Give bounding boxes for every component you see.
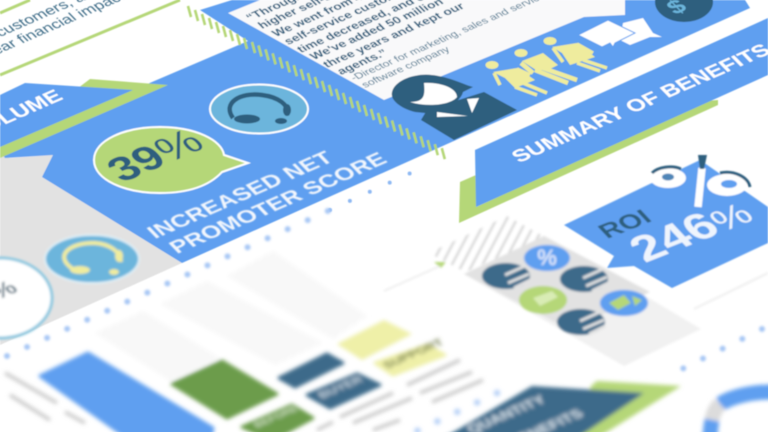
- icon: dollar circle: [655, 0, 713, 22]
- rule: [384, 266, 768, 309]
- chart: donut: [710, 392, 768, 432]
- banner green shadow: [459, 100, 718, 223]
- green hatch divider: [188, 6, 445, 159]
- quote text: [243, 0, 467, 77]
- chart: bar blue: [40, 353, 213, 432]
- big percent icon: [650, 155, 750, 207]
- volume banner: [0, 79, 168, 158]
- blurred lower content: [0, 210, 768, 377]
- icon: navy stripes circle c: [557, 309, 605, 335]
- panel: blue promoter score and quote frame: [0, 0, 750, 263]
- dotted divider: bottom: [417, 393, 497, 431]
- ROI label: ROI: [592, 205, 657, 243]
- banner navy: [440, 386, 644, 432]
- icon: blue percent circle: [524, 245, 570, 271]
- callout: ROI 246 percent: [564, 155, 768, 288]
- banner label: SUMMARY OF BENEFITS: [507, 40, 768, 166]
- heading: summary of benefits: [459, 18, 768, 223]
- intro text block: [0, 0, 180, 75]
- icon: blue percent circle: %: [537, 245, 557, 270]
- chart: label green: [242, 404, 313, 432]
- dotted divider: lower left: [7, 210, 330, 356]
- heading: increased net promoter score: INCREASED NET: [142, 147, 338, 242]
- chart: bar yellow: [337, 320, 412, 360]
- icon: headset circle yellow: [45, 235, 139, 283]
- chart: label navy: [307, 373, 380, 408]
- callout: 39 percent bubble: 39%: [98, 122, 213, 190]
- icon: navy stripes circle a: [482, 263, 530, 289]
- heading: quantity benefits banner: [440, 381, 681, 432]
- chart: hatched backing bands: [95, 251, 367, 381]
- banner blue: [0, 83, 133, 147]
- banner label: [464, 393, 587, 432]
- heading: increased net promoter score: PROMOTER SCORE: [164, 148, 392, 257]
- panel: icon plate: [464, 236, 701, 366]
- top green rule: [0, 0, 180, 75]
- ROI value: 246%: [619, 191, 762, 270]
- body text placeholder rows: [5, 360, 483, 430]
- callout: white percent circle: [0, 258, 52, 338]
- banner blue: [475, 18, 768, 207]
- chart: label yellow: SUPPORT: [380, 336, 447, 371]
- quote attribution: software company: [359, 44, 453, 90]
- icon: headset circle: [210, 84, 308, 134]
- banner green shadow: [575, 381, 681, 432]
- banner green shadow: [0, 79, 168, 158]
- icon: navy stripes circle b: [560, 266, 608, 292]
- percent icon plate hatch: [429, 216, 545, 272]
- quote text: three years and kept our: [320, 0, 467, 70]
- dotted divider: right: [666, 329, 762, 377]
- small green marker: [434, 262, 446, 268]
- chart: label navy: BUYER: [315, 373, 366, 401]
- chart: bar green: [172, 361, 277, 418]
- panel: quote card: [228, 0, 625, 100]
- chart: bar navy: [279, 354, 343, 387]
- icon: three yellow people: [486, 37, 607, 95]
- dotted divider: upper: [330, 165, 428, 210]
- panel: gray volume background: [0, 155, 182, 345]
- quote text: agents.”: [334, 47, 391, 77]
- icon: agent woman: [392, 75, 517, 140]
- icon: green document circle: [519, 286, 567, 314]
- icon: speech bubbles: [578, 18, 662, 47]
- icon: globe circle: [600, 290, 648, 316]
- chart: label green: BEFORE: [252, 404, 301, 430]
